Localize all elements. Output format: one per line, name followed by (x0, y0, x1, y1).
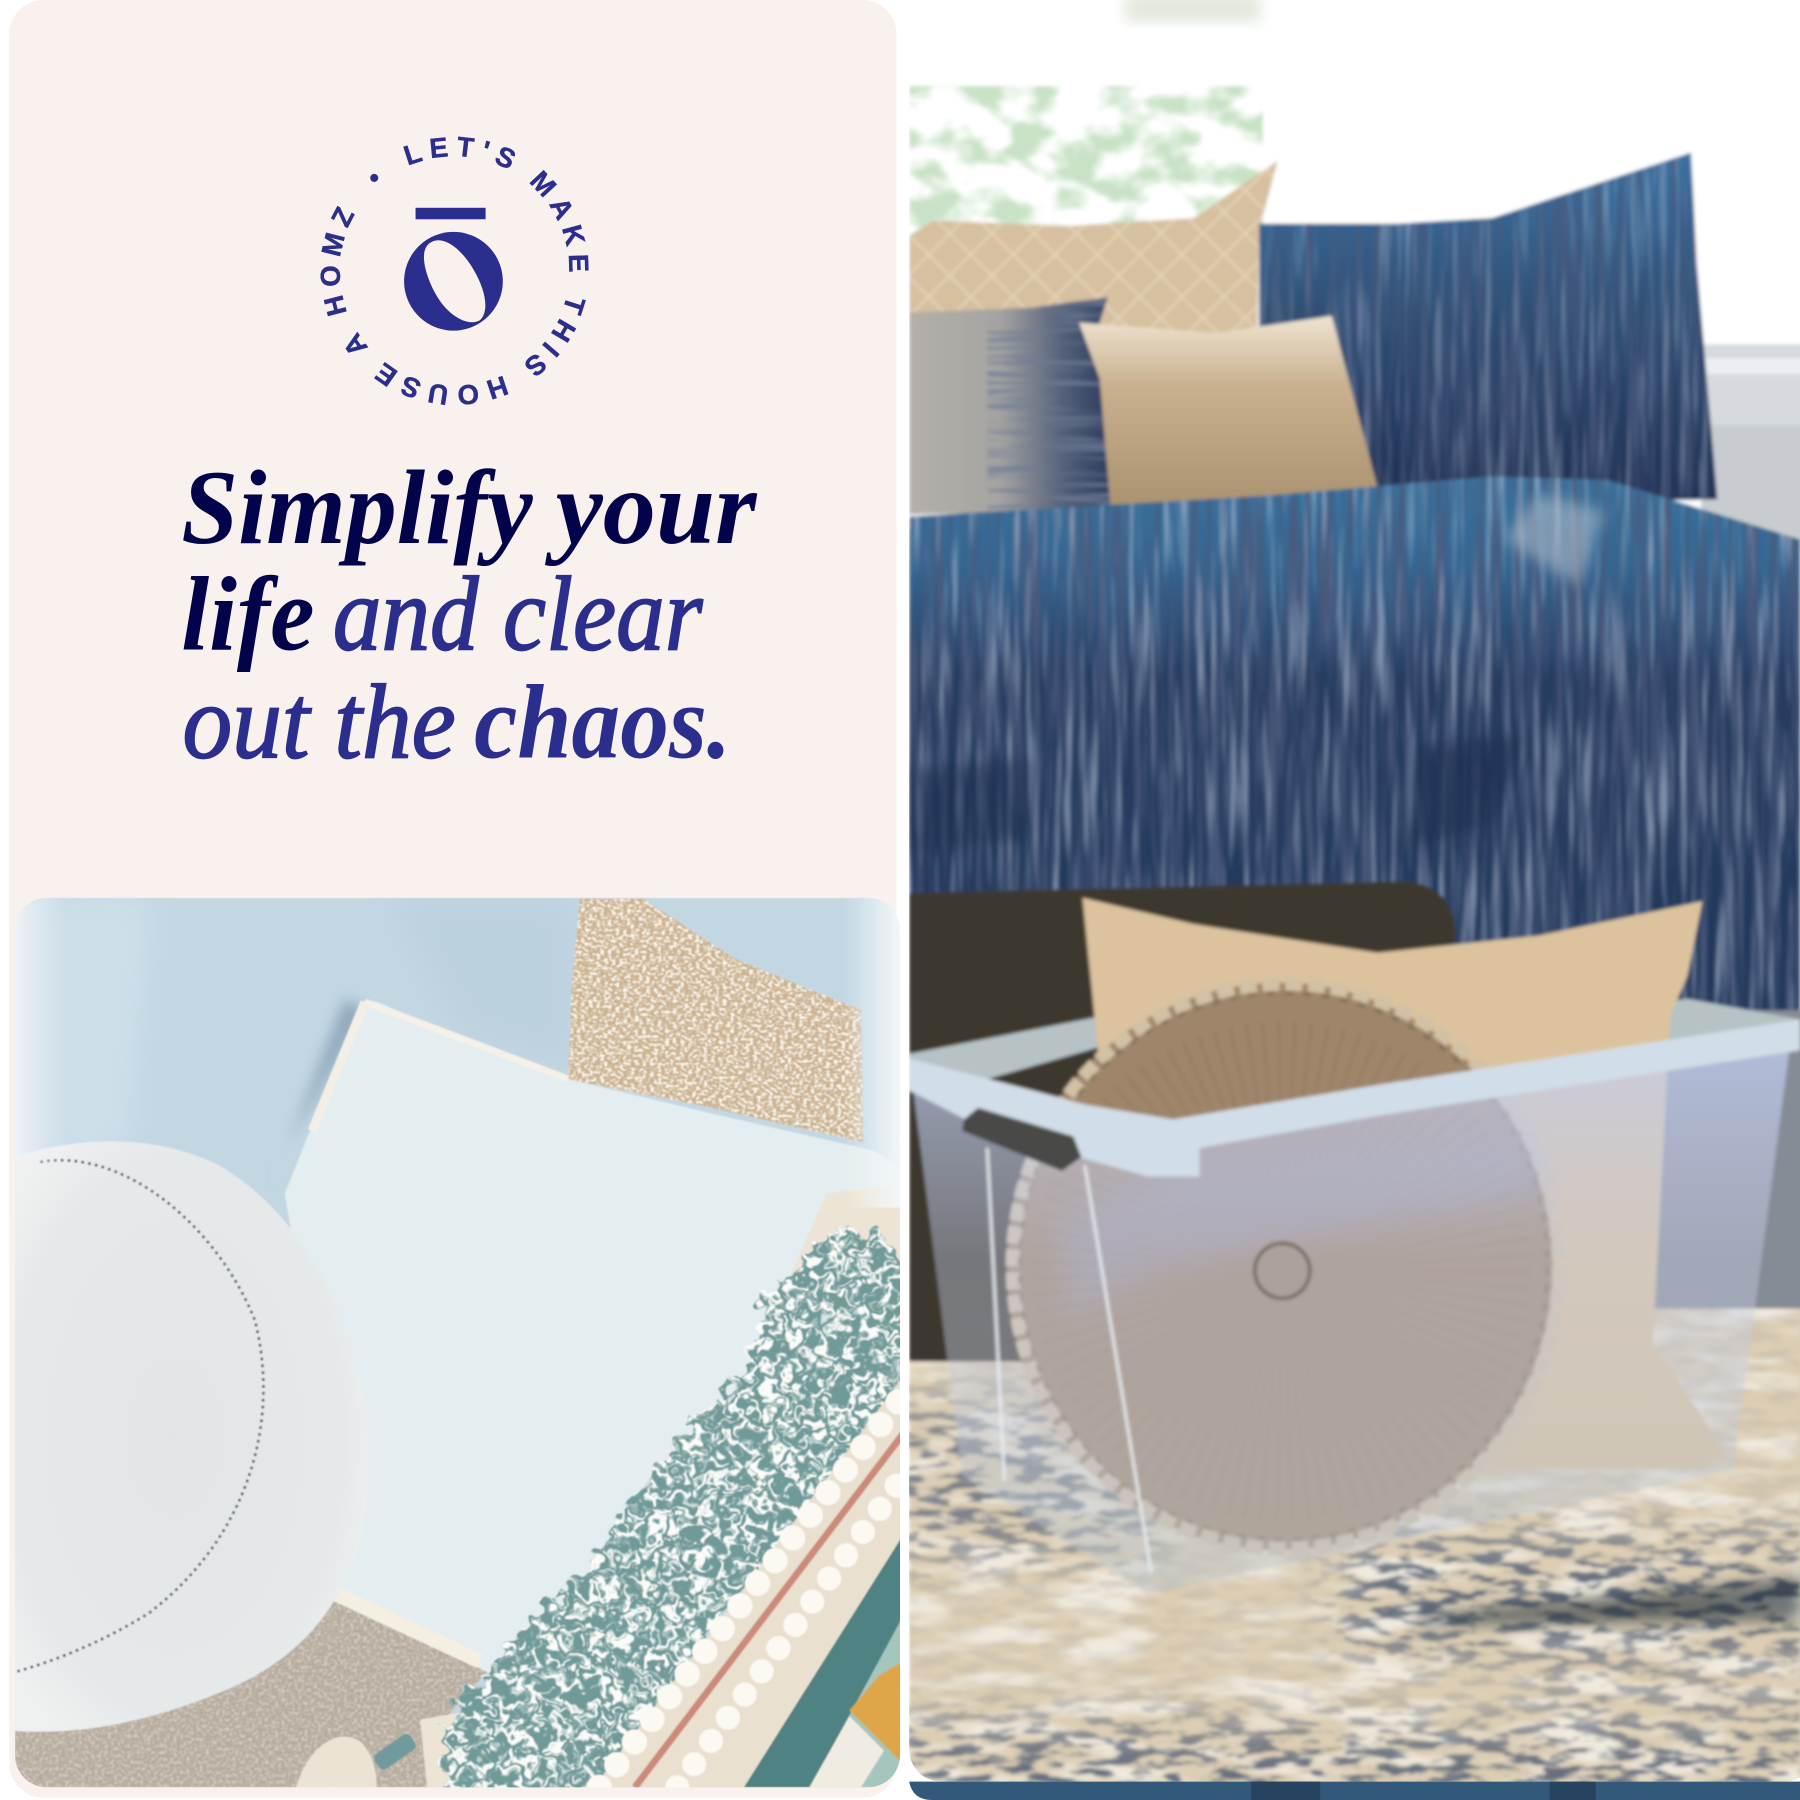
round tufted pillow (1007, 983, 1559, 1550)
beige diamond pillow (909, 161, 1278, 333)
rear tan pillow (1083, 898, 1728, 1469)
headline (181, 449, 757, 781)
photo: clear storage bin with pillows (895, 0, 1800, 1791)
round pouf pillow (15, 1141, 370, 1732)
backdrop seen through bin (909, 1010, 1800, 1332)
rug (895, 1309, 1800, 1791)
woven pillow (568, 899, 863, 1142)
bright window (895, 0, 1800, 528)
fringed cushion (420, 1182, 930, 1800)
circular slogan text: LET'S MAKE THIS HOUSE A HOMZ (320, 136, 589, 406)
left soft edge (15, 898, 67, 1162)
bin rim (909, 1019, 1800, 1177)
translucent bin body (913, 1039, 1791, 1593)
strip of next image below photo (909, 1782, 1800, 1800)
headline word: chaos.: chaos. (474, 664, 731, 781)
photo: pillows on blue sofa (15, 898, 930, 1800)
logo macron bar (416, 208, 486, 219)
navy bedspread (909, 476, 1800, 1033)
headline word: Simplify: Simplify (181, 449, 534, 566)
blue reflection on pillow (1056, 1136, 1538, 1320)
logo badge (320, 136, 589, 406)
cream band (591, 1372, 907, 1791)
teal stripe (744, 1529, 907, 1787)
center button (1255, 1243, 1310, 1298)
radial pleats (1154, 1142, 1411, 1399)
logo dot (370, 174, 378, 182)
tassel (296, 1732, 418, 1787)
sofa fabric background (15, 898, 900, 1787)
white linen pillow (285, 1000, 907, 1699)
rear bin rim (909, 999, 1800, 1085)
logo o mark (404, 232, 503, 331)
headline word: your: your (545, 449, 757, 566)
big blue pillow (1259, 153, 1717, 505)
yellow patch (848, 1662, 900, 1762)
pale teal band (846, 1620, 900, 1788)
teal fringe (442, 1223, 930, 1800)
wall molding (1701, 344, 1800, 551)
carpet (15, 1590, 494, 1787)
headline word: life: life (181, 556, 315, 673)
cushion tag and corner (420, 1182, 907, 1787)
bin corner ridge (987, 1148, 1151, 1573)
headline words: and clear: and clear (333, 556, 703, 673)
right soft edge (844, 898, 901, 1208)
bobble rows (599, 1383, 913, 1787)
headline words: out the: out the (183, 664, 456, 781)
cream patch (809, 1716, 884, 1787)
sequin beige pillow (1079, 316, 1380, 515)
panel: cream card (9, 0, 897, 1798)
striped accent pillow (909, 297, 1111, 514)
bin latch (962, 1108, 1081, 1171)
dark bin lid (909, 882, 1456, 1361)
dotted stitching (17, 1160, 263, 1671)
rug dark bands (895, 1309, 1800, 1791)
